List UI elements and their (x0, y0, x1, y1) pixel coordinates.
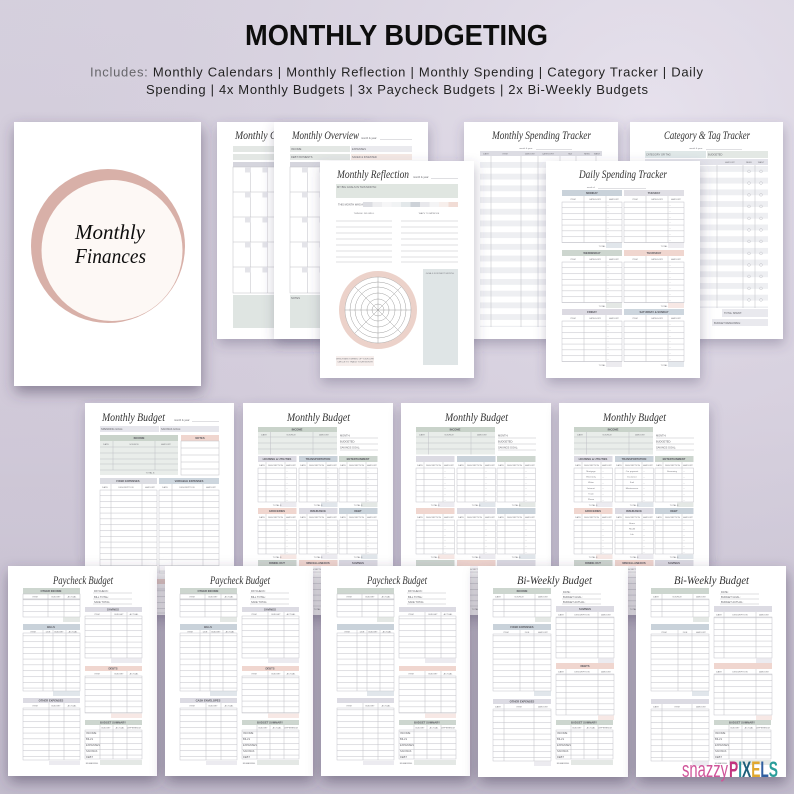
right blank tables (399, 607, 456, 718)
table: housing and utilities: Phone (588, 499, 595, 501)
heading: Monthly Budget (602, 410, 667, 424)
column headings: WAYS TO IMPROVE (419, 212, 440, 215)
table: housing and utilities: HOUSING & UTILITIES (579, 457, 608, 461)
summary lines: BUDGET ACTUAL: (563, 600, 586, 604)
table: other income (180, 588, 237, 622)
month label: month & year: (519, 147, 533, 150)
summary lines: BILL TOTAL: (408, 595, 423, 599)
table: housing and utilities: Trash (588, 492, 595, 496)
heading: Monthly Budget (444, 410, 509, 424)
table: housing and utilities: Water (588, 481, 594, 484)
summary lines: BILL TOTAL: (94, 595, 109, 599)
summary lines: PAYCHECK: (251, 589, 266, 593)
heading: Monthly Budget (101, 410, 166, 424)
note block: WHICH BEST WHEEL OF YOUR LIFE (336, 358, 374, 360)
subtitle: included items: Includes: Monthly Calendars | Monthly Reflection | Monthly Spending | Category Tracker | Daily (90, 64, 704, 80)
category and budget bars: CATEGORY OR TAG (646, 152, 671, 156)
budget summary lines (340, 434, 378, 450)
page: daily spending tracker (546, 161, 700, 378)
heading: Bi-Weekly Budget (517, 575, 593, 587)
subtitle: included items (90, 64, 704, 97)
things I did well lines (336, 221, 392, 262)
table: debt (655, 508, 694, 559)
income table: INCOME (292, 428, 303, 432)
table: tuesday (624, 190, 684, 248)
month label: month & year: (361, 136, 377, 140)
heading: Paycheck Budget (209, 575, 271, 587)
table: insurance: Life (630, 534, 635, 536)
summary lines: BUDGET GOAL: (721, 595, 741, 599)
table: debts (242, 666, 299, 718)
table: debts (556, 663, 614, 720)
table: miscellaneous (615, 560, 654, 611)
note block: CIRCLE TO TRACK YOUR MONTH (337, 360, 373, 364)
cover title: Finances (74, 244, 146, 268)
heading: Monthly Reflection (336, 167, 409, 181)
month label (413, 175, 458, 179)
left blank tables (337, 588, 394, 765)
heading: Category & Tag Tracker (664, 128, 750, 142)
table: other expenses: OTHER EXPENSES (39, 699, 64, 703)
table: savings: SAVINGS (264, 608, 276, 612)
table: fixed expenses: AMOUNT (145, 486, 155, 489)
table: savings: SAVINGS (352, 561, 364, 565)
table: bills (23, 624, 80, 696)
column headings: THINGS I DID WELL (354, 213, 375, 215)
table: other expenses (180, 698, 237, 765)
heading: Monthly Spending Tracker (491, 128, 591, 142)
table: housing and utilities (574, 456, 612, 507)
table: entertainment: ENTERTAINMENT (347, 457, 370, 461)
table: transportation: Insurance (627, 476, 638, 478)
table: miscellaneous (299, 560, 338, 611)
table: fixed expenses: DATE (102, 486, 108, 489)
table: dining out (258, 560, 296, 611)
table: transportation (615, 456, 654, 507)
goal bars (100, 426, 219, 432)
table: insurance: INSURANCE (626, 509, 642, 513)
table: entertainment (339, 456, 378, 507)
heading: Monthly Budget (286, 410, 351, 424)
table: savings: SAVINGS (579, 607, 591, 611)
month label (689, 147, 742, 150)
budget remaining (712, 319, 768, 326)
bar labels (291, 147, 377, 300)
month label (174, 418, 219, 422)
calendar grid (290, 146, 412, 328)
table: fixed expenses: DESCRIPTION (119, 487, 134, 489)
summary lines: BUDGET GOAL: (563, 595, 583, 599)
page: monthly budget, filled categories (559, 403, 709, 615)
table: groceries: GROCERIES (269, 509, 285, 513)
income table (574, 427, 653, 454)
blank table row 3 (416, 560, 536, 611)
subtitle: included items: Spending | 4x Monthly Budgets | 3x Paycheck Budgets | 2x Bi-Weekly Budgets (146, 82, 648, 97)
table header: WANT (594, 152, 601, 156)
goals for next month (423, 269, 458, 365)
table: other expenses: CASH ENVELOPES (196, 699, 221, 703)
table: lower section (100, 579, 219, 613)
table: income: DATE (103, 443, 109, 446)
table: income: AMOUNT (161, 443, 171, 446)
page: paycheck budget 2 (165, 566, 313, 776)
total spent: TOTAL SPENT: (724, 311, 742, 315)
table: insurance (299, 508, 338, 559)
table: insurance: Home (629, 523, 636, 525)
month label (519, 147, 572, 150)
page: monthly spending tracker (464, 122, 618, 339)
table header: NEED (746, 162, 752, 164)
week label (587, 187, 646, 189)
summary lines (720, 590, 759, 604)
table: notes (181, 435, 219, 475)
table: housing and utilities: Mortgage (586, 470, 596, 473)
table: budget summary: BUDGET SUMMARY (100, 721, 126, 725)
table: groceries (574, 508, 612, 559)
income table (258, 427, 337, 454)
cover title: Monthly (74, 220, 146, 244)
table: budget summary: BUDGET SUMMARY (729, 721, 755, 725)
table: savings (655, 560, 694, 611)
table: friday: FRIDAY (587, 310, 597, 314)
summary lines: BUDGET ACTUAL: (721, 600, 744, 604)
summary lines: DATE: (563, 590, 571, 594)
income table (416, 427, 495, 454)
table header: NEED (584, 154, 590, 156)
logo: snazzy pixels: PIXELS (729, 757, 778, 782)
table header: WANT (758, 161, 765, 164)
striped rows and check circles (645, 165, 768, 308)
table: income: INCOME (134, 436, 145, 440)
bar labels: EXPENSES (352, 147, 366, 151)
month rating scale (338, 202, 458, 207)
heading: Paycheck Budget (52, 575, 114, 587)
page: monthly budget, blank categories B (401, 403, 551, 615)
month label (361, 136, 412, 140)
table: debt (339, 508, 378, 559)
big goals box (336, 184, 458, 198)
table: variable expenses: VARIABLE EXPENSES (175, 479, 204, 483)
cover inner circle (42, 180, 182, 321)
table: savings (85, 607, 142, 663)
total spent (722, 309, 768, 317)
table: entertainment: ENTERTAINMENT (663, 457, 686, 461)
summary lines (93, 589, 132, 604)
table: saturday and sunday: SATURDAY & SUNDAY (640, 310, 669, 314)
column headings (354, 212, 440, 215)
heading: Bi-Weekly Budget (674, 575, 750, 587)
table: housing and utilities: HOUSING & UTILITIES (263, 457, 292, 461)
page: paycheck budget 1 (8, 566, 157, 776)
striped rows (480, 156, 602, 327)
table: insurance: Health (629, 528, 636, 530)
budget summary lines (656, 434, 694, 450)
table header: TAX (568, 152, 573, 156)
summary lines: DATE: (721, 590, 729, 594)
table: fixed expenses (100, 478, 157, 573)
summary lines: PAYCHECK: (94, 589, 109, 593)
summary lines: SAVE TOTAL: (251, 600, 268, 604)
big goals box: MY BIG GOALS IN THIS MONTH: (337, 185, 377, 189)
table: budget summary (714, 720, 771, 765)
table: income: TOTAL $ (146, 472, 155, 474)
table: monday (562, 190, 622, 248)
table: monday: MONDAY (586, 191, 598, 195)
income table: INCOME (450, 428, 461, 432)
page: cover (14, 122, 201, 386)
table: housing and utilities: Electricity (586, 476, 597, 478)
page: monthly overview (274, 122, 428, 339)
table: friday (562, 309, 622, 367)
table: debts: DEBTS (580, 664, 590, 668)
table: notes: NOTES (195, 436, 205, 440)
table: thursday (624, 250, 684, 308)
cover ring (31, 169, 185, 323)
table: savings (556, 606, 614, 663)
table: other income: OTHER INCOME (41, 589, 62, 593)
table: housing and utilities (258, 456, 296, 507)
table: other income: OTHER INCOME (198, 589, 219, 593)
table: bills (180, 624, 237, 696)
page: monthly budget, blank categories A (243, 403, 393, 615)
table: other expenses (493, 699, 551, 766)
table: housing and utilities: Internet (587, 487, 595, 490)
table: wednesday: WEDNESDAY (583, 251, 601, 255)
table header: AMOUNT (525, 152, 535, 156)
bar labels: NOTES (291, 296, 300, 300)
budget remaining: BUDGET REMAINING: (714, 321, 741, 325)
month label: month & year: (689, 147, 703, 150)
table: variable expenses: DESCRIPTION (180, 487, 195, 489)
table: budget summary (85, 720, 142, 765)
category and budget bars: BUDGETED (708, 152, 723, 156)
summary lines: PAYCHECK: (408, 589, 423, 593)
right blank tables (714, 606, 772, 720)
title: MONTHLY BUDGETING (245, 20, 548, 52)
page: bi-weekly budget 1 (478, 566, 628, 777)
table: other expenses: OTHER EXPENSES (510, 700, 535, 704)
income table: INCOME (608, 428, 619, 432)
heading: Paycheck Budget (366, 575, 428, 587)
table header: AMOUNT (725, 161, 735, 164)
table: income: SOURCE (129, 444, 139, 446)
ways to improve lines (401, 221, 458, 262)
table: bills: BILLS (204, 625, 212, 629)
summary lines: SAVE TOTAL: (94, 600, 111, 604)
table: debts: DEBTS (108, 667, 118, 671)
table: variable expenses: AMOUNT (206, 486, 216, 489)
table: savings: SAVINGS (107, 608, 119, 612)
table: insurance (615, 508, 654, 559)
table: fixed expenses: FIXED EXPENSES (116, 479, 140, 483)
table: dining out: DINING OUT (269, 561, 285, 565)
table: entertainment (655, 456, 694, 507)
table: bills: BILLS (47, 625, 55, 629)
goal bars: SPENDING GOAL: (101, 427, 123, 431)
blank table row 2 (416, 508, 536, 559)
table: budget summary: BUDGET SUMMARY (571, 721, 597, 725)
table: debts: DEBTS (265, 667, 275, 671)
category and budget bars (645, 151, 768, 158)
blank table row 1 (416, 456, 536, 507)
table header: CATEGORY (542, 152, 555, 156)
bar labels: DEBT PAYMENTS (291, 155, 313, 159)
table: savings (242, 607, 299, 663)
page: category and tag tracker (630, 122, 783, 339)
table: miscellaneous: MISCELLANEOUS (622, 561, 646, 565)
table: fixed expenses (493, 624, 551, 696)
calendar grid (233, 146, 355, 328)
logo: snazzy pixels: snazzy (682, 757, 728, 782)
page: paycheck budget 3, blank headers (321, 566, 470, 776)
heading: Monthly Overview (291, 128, 359, 142)
table: fixed expenses: FIXED EXPENSES (510, 625, 534, 629)
table: debt: DEBT (670, 509, 678, 513)
goals for next month: GOALS FOR NEXT MONTH: (426, 272, 455, 275)
table header (645, 159, 768, 165)
month rating scale: THIS MONTH WAS A (338, 202, 363, 206)
table: savings (339, 560, 378, 611)
table: entertainment: Streaming (667, 470, 678, 473)
table: transportation: Car payment (626, 470, 639, 473)
table: insurance: INSURANCE (310, 509, 326, 513)
table: miscellaneous: MISCELLANEOUS (306, 561, 330, 565)
page: monthly calendar (217, 122, 371, 339)
week label: week of: (587, 187, 595, 189)
cover title (74, 220, 146, 268)
table: thursday: THURSDAY (647, 251, 662, 255)
table: groceries (258, 508, 296, 559)
summary lines (250, 589, 289, 604)
summary lines: SAVE TOTAL: (408, 600, 425, 604)
left blank tables (651, 588, 709, 766)
table header: ITEM (502, 154, 508, 156)
summary lines (562, 590, 601, 604)
table: groceries: GROCERIES (585, 509, 601, 513)
table header: DATE (483, 152, 489, 156)
table: dining out: DINING OUT (585, 561, 601, 565)
table: budget summary (242, 720, 299, 765)
table header (480, 151, 602, 156)
table: transportation: Maintenance (626, 487, 639, 490)
table: dining out (574, 560, 612, 611)
bar labels: SAVED & INVESTED (352, 155, 377, 159)
table: saturday and sunday (624, 309, 684, 367)
goal bars: SAVINGS GOAL: (161, 427, 181, 431)
life wheel chart (342, 274, 414, 346)
page: bi-weekly budget 2 (636, 566, 786, 777)
table: transportation: Fuel (630, 482, 635, 484)
month label: month & year: (413, 175, 429, 179)
table: transportation: TRANSPORTATION (622, 457, 646, 461)
table: other income (23, 588, 80, 622)
table: tuesday: TUESDAY (648, 191, 660, 195)
table: wednesday (562, 250, 622, 308)
table: budget summary (556, 720, 613, 765)
month label: month & year: (174, 418, 190, 422)
heading: Daily Spending Tracker (578, 167, 667, 181)
table: debt: DEBT (354, 509, 362, 513)
heading: Monthly Calendar (234, 128, 307, 142)
table: transportation (299, 456, 338, 507)
table: budget summary: BUDGET SUMMARY (414, 721, 440, 725)
table: variable expenses: DATE (162, 486, 168, 489)
bar labels: INCOME (291, 147, 302, 151)
table: income (493, 588, 551, 622)
note block (336, 356, 374, 366)
table: income (100, 435, 178, 475)
table: other expenses (23, 698, 80, 765)
page: monthly reflection (320, 161, 474, 378)
page: monthly budget, savings layout (85, 403, 234, 615)
table: budget summary (399, 720, 456, 765)
table: budget summary: BUDGET SUMMARY (257, 721, 283, 725)
summary lines: BILL TOTAL: (251, 595, 266, 599)
table: transportation: TRANSPORTATION (306, 457, 330, 461)
table: savings: SAVINGS (668, 561, 680, 565)
summary lines (407, 589, 446, 604)
table: debts (85, 666, 142, 718)
table: income: INCOME (517, 589, 528, 593)
table: variable expenses (159, 478, 219, 573)
budget summary lines (498, 434, 536, 450)
